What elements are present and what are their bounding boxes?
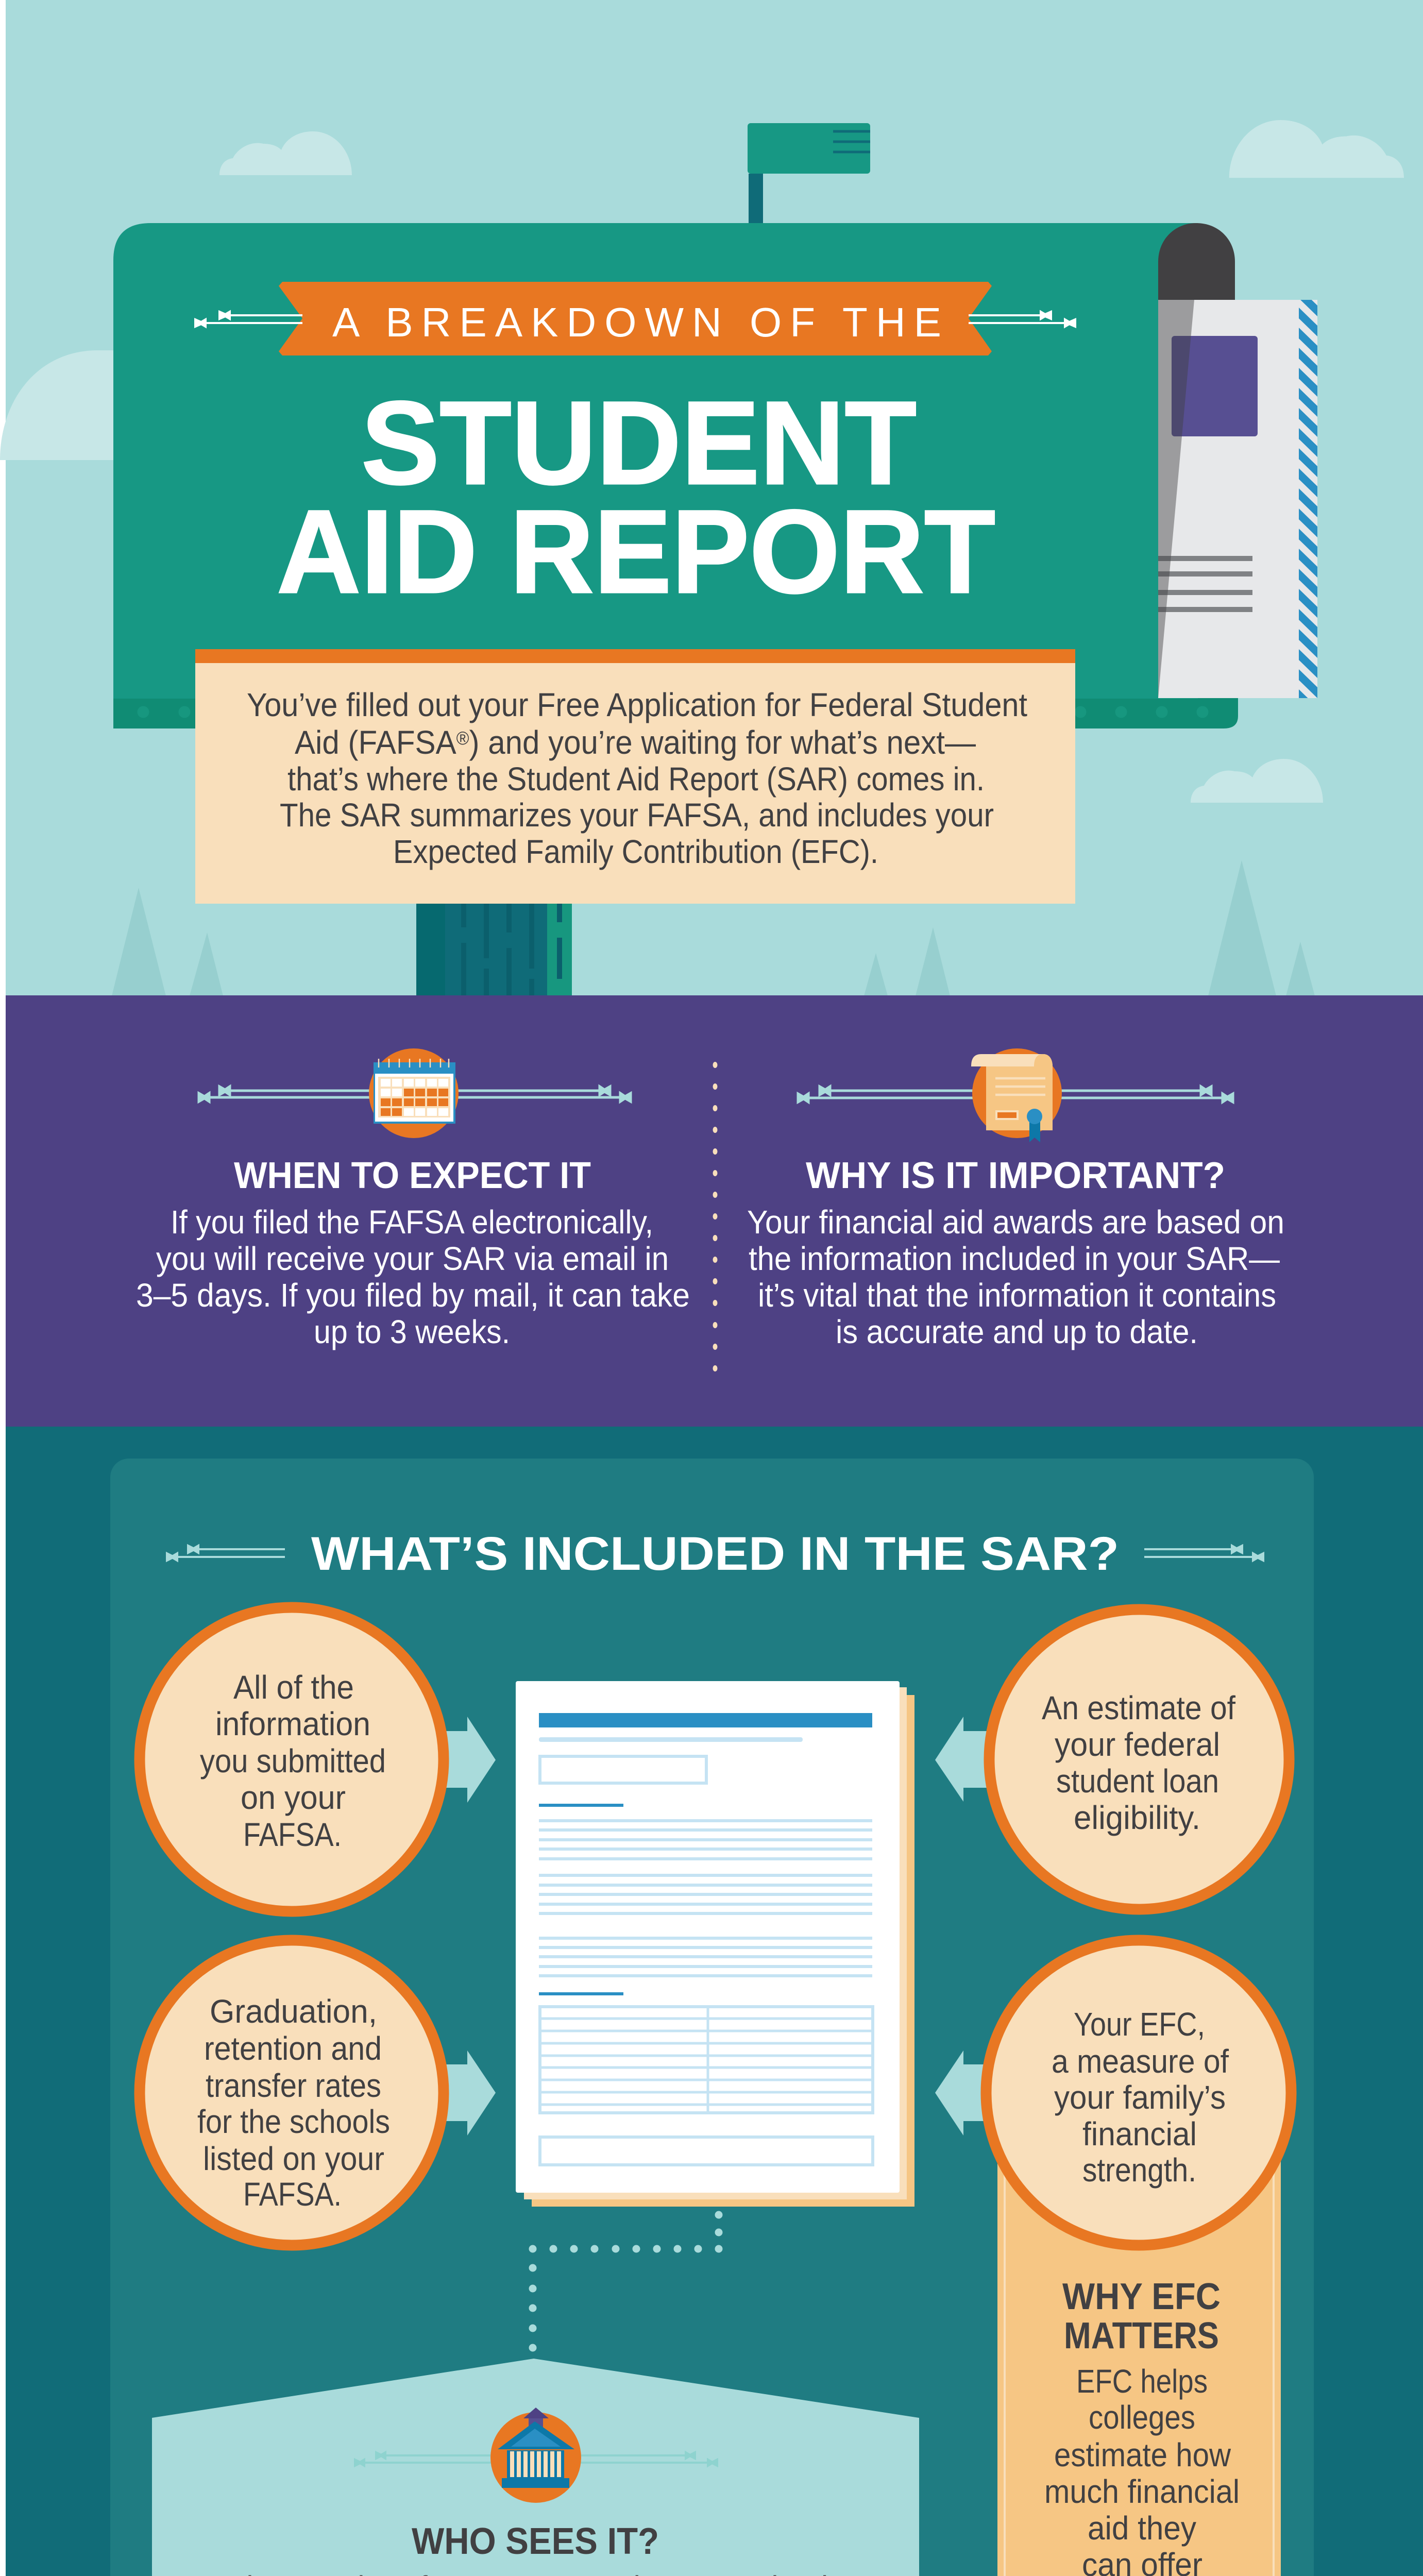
- ornament left: [167, 1546, 285, 1561]
- panel: why is it important: [747, 1048, 1284, 1350]
- circle: all of the information: on your: [241, 1779, 346, 1816]
- circle: all of the information: All of the: [233, 1669, 354, 1706]
- circle: your EFC: [986, 1940, 1291, 2245]
- ribbon heading: WHY EFC: [1062, 2276, 1221, 2317]
- ribbon text: much financial: [1044, 2473, 1240, 2510]
- cloud top right: [1229, 120, 1404, 178]
- intro card: [195, 649, 1075, 904]
- orange title ribbon: [279, 282, 992, 355]
- circle: graduation rates: transfer rates: [206, 2067, 381, 2104]
- arrow bottom left: [433, 2050, 496, 2136]
- circle: graduation rates: [140, 1940, 444, 2245]
- body text: Your financial aid awards are based on: [747, 1204, 1284, 1241]
- circle: federal student loan: [989, 1609, 1289, 1909]
- circle: all of the information: you submitted: [200, 1742, 386, 1780]
- heading: WHY IS IT IMPORTANT?: [806, 1155, 1225, 1196]
- ribbon text: aid they: [1088, 2510, 1196, 2547]
- circle: all of the information: information: [215, 1705, 370, 1742]
- intro text: Aid (FAFSA: [295, 724, 467, 761]
- panel: what's included: [110, 1459, 1314, 2576]
- mailbox flag: [748, 123, 870, 225]
- ornament right: [1144, 1546, 1263, 1561]
- ribbon text: estimate how: [1054, 2436, 1231, 2473]
- body text: 3–5 days. If you filed by mail, it can take: [136, 1277, 690, 1314]
- ribbon ornament left: [195, 312, 302, 327]
- body text: [747, 1204, 1284, 1350]
- circle: graduation rates: Graduation,: [210, 1993, 377, 2030]
- page background: [6, 0, 1423, 995]
- arrow top left: [433, 1717, 496, 1803]
- panel: when to expect it: [136, 1048, 690, 1350]
- ornament lines left: [199, 1087, 631, 1101]
- circle: federal student loan: student loan: [1056, 1762, 1219, 1800]
- icon: calendar: [369, 1048, 459, 1138]
- body text: up to 3 weeks.: [314, 1313, 510, 1350]
- circle: all of the information: FAFSA.: [243, 1816, 342, 1853]
- circle: graduation rates: FAFSA.: [243, 2176, 342, 2213]
- trees: [112, 860, 1315, 996]
- mailbox post: [416, 902, 572, 996]
- body text: [136, 1204, 690, 1350]
- divider dots purple section: [713, 1062, 717, 1371]
- circle: graduation rates: retention and: [204, 2030, 382, 2067]
- icon: building: [490, 2408, 581, 2503]
- heading: WHEN TO EXPECT IT: [234, 1155, 591, 1196]
- ribbon text: [1030, 2363, 1255, 2576]
- cloud top left: [219, 131, 352, 175]
- intro text: [247, 686, 1027, 870]
- main title: STUDENT: [361, 377, 917, 509]
- ribbon text: colleges: [1089, 2399, 1195, 2436]
- dotted connector: [529, 2211, 722, 2351]
- circle: graduation rates: listed on your: [203, 2140, 384, 2177]
- ornament lines right: [798, 1087, 1233, 1102]
- circle: federal student loan: eligibility.: [1074, 1799, 1200, 1836]
- heading: WHO SEES IT?: [412, 2521, 659, 2562]
- hero section: mailbox scene: [0, 120, 1404, 996]
- circle: your EFC: financial: [1082, 2115, 1197, 2153]
- ribbon heading: MATTERS: [1064, 2315, 1219, 2357]
- body text: it’s vital that the information it contains: [758, 1277, 1276, 1314]
- body text: If you filed the FAFSA electronically,: [171, 1204, 653, 1241]
- intro text: that’s where the Student Aid Report (SAR) comes in.: [287, 760, 985, 798]
- circle: your EFC: your family’s: [1054, 2079, 1226, 2116]
- intro text: Expected Family Contribution (EFC).: [393, 833, 878, 870]
- cloud lower right: [1191, 759, 1323, 803]
- circle: graduation rates: for the schools: [197, 2103, 390, 2140]
- circle: your EFC: Your EFC,: [1074, 2006, 1205, 2043]
- main title: AID REPORT: [277, 485, 995, 618]
- ribbon: why EFC matters: [997, 2138, 1281, 2576]
- cloud behind mailbox: [0, 350, 124, 460]
- circle: all of the information: [140, 1607, 444, 1911]
- ribbon ornament right: [969, 312, 1075, 327]
- intro text: The SAR summarizes your FAFSA, and includes your: [280, 796, 994, 834]
- ribbon text: A BREAKDOWN OF THE: [332, 299, 941, 345]
- circle: federal student loan: your federal: [1055, 1726, 1220, 1763]
- body text: is accurate and up to date.: [836, 1313, 1198, 1350]
- circle: your EFC: strength.: [1082, 2151, 1196, 2189]
- icon: scroll: [971, 1048, 1062, 1142]
- SAR document: [516, 1681, 914, 2207]
- teal section background: [6, 1427, 1423, 2576]
- body text: you will receive your SAR via email in: [156, 1240, 669, 1277]
- main title: [277, 377, 995, 618]
- mailbox bottom band: [113, 696, 1238, 728]
- mailbox door: [1158, 223, 1235, 309]
- purple section background: [6, 995, 1423, 1427]
- intro text: You’ve filled out your Free Application for Federal Student: [247, 686, 1027, 723]
- ornament lines: [355, 2452, 717, 2466]
- arrow bottom right: [935, 2050, 1005, 2136]
- ribbon text: EFC helps: [1076, 2363, 1208, 2400]
- body text: the information included in your SAR—: [749, 1240, 1280, 1277]
- panel: who sees it: [152, 2359, 919, 2576]
- circle: federal student loan: An estimate of: [1042, 1689, 1235, 1726]
- mailbox body: [113, 223, 1198, 699]
- intro text: ®: [456, 727, 469, 749]
- envelope: [1158, 300, 1317, 698]
- circle: your EFC: a measure of: [1052, 2043, 1229, 2080]
- arrow top right: [935, 1717, 1005, 1802]
- intro text: ) and you’re waiting for what’s next—: [469, 724, 976, 761]
- ribbon heading: [1062, 2276, 1221, 2357]
- heading: WHAT’S INCLUDED IN THE SAR?: [311, 1528, 1119, 1580]
